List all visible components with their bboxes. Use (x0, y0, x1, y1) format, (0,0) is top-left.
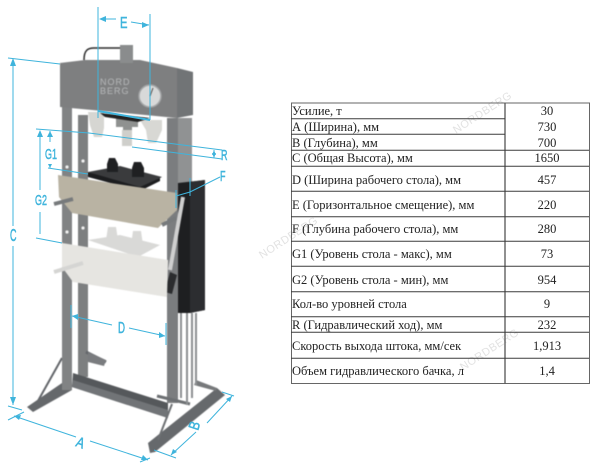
row labels: Скорость выхода штока, мм/сек (292, 339, 462, 353)
row values: 457 (538, 173, 556, 187)
post holes (65, 159, 85, 234)
row values: 220 (538, 198, 556, 212)
watermarks: NORDBERG (451, 90, 514, 137)
row values: 700 (538, 136, 556, 150)
table borders (291, 103, 590, 384)
dimension G (36, 129, 89, 243)
row labels: Объем гидравлического бачка, л (292, 364, 464, 378)
rear right post (178, 118, 192, 186)
dimension F (176, 177, 220, 208)
watermarks (257, 90, 521, 374)
cross beam upper rail (72, 380, 168, 418)
pressure gauge (139, 85, 161, 107)
beam pins (54, 199, 176, 225)
dimension B (154, 392, 234, 458)
row labels: D (Ширина рабочего стола), мм (292, 173, 461, 187)
cross beam (72, 373, 168, 418)
E base line (98, 111, 150, 120)
row labels: В (Глубина), мм (292, 136, 378, 150)
row values: 73 (541, 247, 553, 261)
watermarks: NORDBERG (257, 215, 320, 262)
hydraulic pump (178, 180, 205, 313)
left foot (27, 383, 72, 412)
dimension labels: F (220, 168, 226, 185)
row values: 1,4 (539, 364, 556, 378)
dimension C (8, 58, 60, 410)
ghost table (88, 227, 160, 257)
dimension lines (8, 7, 234, 462)
row labels: R (Гидравлический ход), мм (292, 318, 443, 332)
row values: 280 (538, 222, 556, 236)
front right post (167, 118, 178, 403)
row labels (292, 104, 474, 378)
row labels: F (Глубина рабочего стола), мм (292, 222, 458, 236)
row values: 1,913 (533, 339, 561, 353)
row labels: Е (Горизонтальное смещение), мм (292, 198, 474, 212)
row values: 232 (538, 318, 556, 332)
left foot brace (34, 352, 106, 408)
row values: 730 (538, 120, 556, 134)
ghost pin (54, 263, 83, 272)
dimension arrowheads (10, 16, 232, 460)
specification table (291, 103, 590, 384)
work table plate (88, 158, 162, 191)
rams (88, 112, 162, 146)
dimension labels: D (118, 319, 125, 337)
dimension labels: G2 (35, 192, 47, 209)
press illustration (27, 45, 225, 453)
row labels: G2 (Уровень стола - мин), мм (292, 273, 448, 287)
hydraulic head: BERG (100, 86, 130, 96)
dimension labels: A (74, 434, 88, 452)
dimension labels: C (10, 226, 17, 245)
dimension D (71, 305, 166, 345)
dimension labels: G1 (45, 146, 57, 163)
upper beige beam (58, 175, 177, 228)
top reservoir cylinder (120, 45, 133, 63)
dimension labels (10, 14, 228, 452)
row values: 30 (541, 104, 553, 118)
watermarks: NORDBERG (458, 327, 521, 374)
dimension R (89, 133, 222, 159)
row labels: А (Ширина), мм (292, 120, 379, 134)
row values: 9 (544, 297, 550, 311)
row values: 954 (538, 273, 557, 287)
pedal and braces (157, 396, 190, 440)
row labels: Кол-во уровней стола (292, 297, 407, 311)
pump handle (165, 197, 183, 294)
row labels: Усилие, т (292, 104, 342, 118)
brand logo: NORD (100, 77, 130, 87)
dimension labels: B (185, 419, 204, 432)
rear foot (88, 352, 106, 366)
hydraulic lines (181, 313, 196, 405)
row values (533, 104, 561, 378)
hydraulic head (60, 45, 193, 118)
row labels: G1 (Уровень стола - макс), мм (292, 247, 452, 261)
dimension labels: R (221, 147, 228, 164)
hose (84, 48, 120, 60)
row labels: С (Общая Высота), мм (292, 151, 413, 165)
right foot (148, 388, 225, 453)
dimension A (8, 412, 150, 462)
dimension labels: E (120, 14, 128, 31)
dimension E (98, 7, 150, 120)
ghost beam (62, 243, 168, 297)
rear left post (78, 115, 88, 377)
row values: 1650 (534, 151, 560, 165)
front left post (62, 107, 72, 390)
